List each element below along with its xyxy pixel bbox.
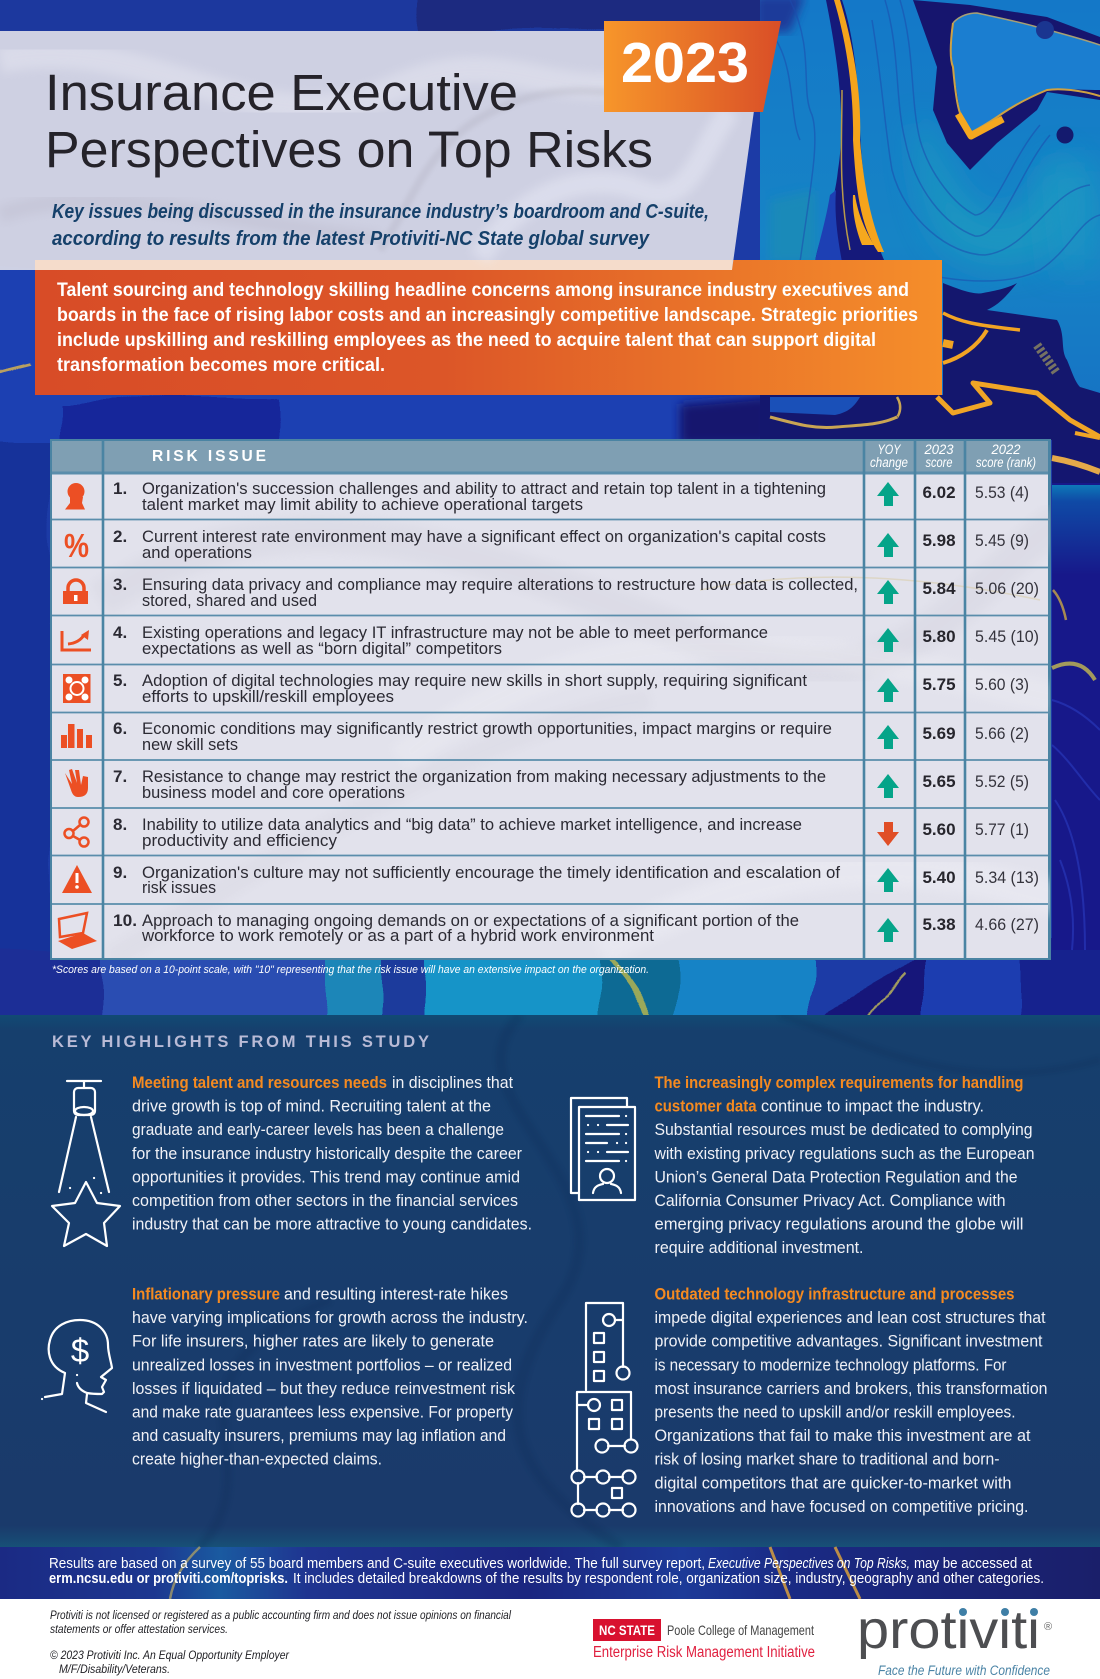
icon: bar chart	[61, 724, 92, 748]
icon: network square	[63, 674, 90, 703]
row 3: 5.06 (20)	[975, 579, 1039, 598]
footnote: *Scores are based on a 10-point scale, with "10" representing that the risk issue will have an extensive impact on the organization.	[52, 964, 649, 976]
row 7: 5.52 (5)	[975, 772, 1029, 791]
row 5: 5.60 (3)	[975, 675, 1029, 694]
NC State logo: NC STATE	[599, 1622, 655, 1638]
icon: head with dollar sign: $	[71, 1332, 89, 1369]
icon: laptop	[58, 913, 97, 949]
risk table	[50, 439, 1060, 960]
row 3: Ensuring data privacy and compliance may require alterations to restructure how data is collected,	[142, 575, 858, 594]
risk table: RISK ISSUE	[152, 448, 266, 465]
translucent title panel	[0, 31, 765, 270]
risk table: score	[926, 455, 952, 470]
highlight: technology: most insurance carriers and brokers, this transformation	[654, 1380, 1048, 1398]
highlight: technology: Organizations that fail to make this investment are at	[654, 1427, 1031, 1445]
row 9: 5.40	[922, 868, 956, 887]
survey note band: may be accessed at	[914, 1556, 1032, 1572]
highlight: technology: Outdated technology infrastructure and processes	[654, 1286, 1014, 1304]
row 4: Existing operations and legacy IT infrastructure may not be able to meet performance	[142, 623, 768, 642]
highlight: customer data: customer data	[654, 1098, 757, 1116]
icon: percent: %	[64, 527, 89, 564]
row 9: 9.	[113, 863, 127, 882]
highlight: talent: graduate and early-career levels has been a challenge	[132, 1121, 504, 1139]
highlight: technology: digital competitors that are quicker-to-market with	[654, 1474, 1012, 1492]
NC State logo: Enterprise Risk Management Initiative	[593, 1644, 815, 1661]
icon: person	[65, 483, 85, 510]
icon: documents	[571, 1098, 635, 1200]
panel: key highlights	[0, 1015, 1100, 1547]
row 8: 8.	[113, 815, 127, 834]
title: Perspectives on Top Risks	[45, 121, 653, 178]
survey note band	[0, 1547, 1100, 1599]
highlight: inflation: create higher-than-expected claims.	[132, 1451, 382, 1469]
highlight: talent	[132, 1074, 532, 1234]
icon: share nodes	[64, 818, 88, 846]
highlight: technology: innovations and have focused on competitive pricing.	[654, 1498, 1028, 1516]
highlight: inflation: and make rate guarantees less expensive. For property	[132, 1404, 514, 1422]
row 9: risk issues	[142, 878, 216, 897]
highlight: customer data: California Consumer Privacy Act. Compliance with	[654, 1192, 1006, 1210]
row 2: 5.98	[922, 531, 956, 550]
highlight: inflation: and resulting interest-rate hikes	[284, 1286, 508, 1304]
highlight: inflation: For life insurers, higher rates are likely to generate	[132, 1333, 494, 1351]
row 4: 5.80	[922, 627, 956, 646]
highlight: inflation: have varying implications for growth across the industry.	[132, 1309, 528, 1327]
summary callout text	[57, 280, 918, 376]
risk table: YOY	[878, 442, 901, 457]
row 10: 4.66 (27)	[975, 915, 1039, 934]
row 3: 3.	[113, 575, 127, 594]
row 5: 5.75	[922, 675, 956, 694]
Protiviti logo	[857, 1600, 1052, 1678]
survey note band: Executive Perspectives on Top Risks,	[708, 1556, 910, 1572]
row 10: workforce to work remotely or as a part of a hybrid work environment	[141, 926, 654, 945]
row 10	[113, 911, 1039, 945]
row 1: 1.	[113, 479, 127, 498]
legal text: statements or offer attestation services.	[50, 1624, 228, 1636]
row 4: 4.	[113, 623, 127, 642]
NC State logo: Poole College of Management	[667, 1622, 814, 1638]
year badge: 2023	[621, 31, 749, 95]
row 5: Adoption of digital technologies may require new skills in short supply, requiring significant	[142, 671, 807, 690]
row 3: stored, shared and used	[142, 591, 317, 610]
row 1: 5.53 (4)	[975, 483, 1029, 502]
background: marbled blue and gold	[0, 0, 1100, 1100]
row 7: business model and core operations	[142, 783, 405, 802]
row 2: 2.	[113, 527, 127, 546]
legal text	[50, 1610, 511, 1676]
row 7	[113, 767, 1029, 802]
Protiviti logo: ®	[1044, 1621, 1052, 1633]
row 8: productivity and efficiency	[142, 831, 337, 850]
highlight: technology: risk of losing market share to traditional and born-	[654, 1451, 1000, 1469]
highlight: talent: competition from other sectors in the financial services	[132, 1192, 518, 1210]
row 8	[113, 815, 1029, 850]
icon: head with dollar sign	[42, 1320, 112, 1412]
grid lines	[52, 441, 1048, 958]
summary callout text: Talent sourcing and technology skilling headline concerns among insurance industry executives and	[57, 280, 909, 301]
icon: growth chart	[62, 630, 91, 650]
row 1: Organization's succession challenges and ability to attract and retain top talent in a tightening	[142, 479, 826, 498]
highlight: talent: Meeting talent and resources needs	[132, 1074, 387, 1092]
highlight: talent: drive growth is top of mind. Recruiting talent at the	[132, 1098, 491, 1116]
highlight: talent: industry that can be more attractive to young candidates.	[132, 1216, 532, 1234]
highlight: inflation: unrealized losses in investment portfolios – or realized	[132, 1356, 512, 1374]
icon: lock	[63, 580, 88, 604]
row 5: 5.	[113, 671, 127, 690]
heading: KEY HIGHLIGHTS FROM THIS STUDY	[52, 1033, 429, 1051]
table body marble	[52, 441, 1060, 960]
survey note band: Results are based on a survey of 55 board members and C-suite executives worldwide. The full survey report,	[49, 1556, 705, 1572]
row 9	[113, 863, 1039, 897]
highlight: customer data: The increasingly complex requirements for handling	[654, 1074, 1024, 1092]
row 7: 5.65	[922, 772, 956, 791]
row 6: new skill sets	[142, 735, 238, 754]
row 2	[113, 527, 1029, 562]
survey note band: erm.ncsu.edu or protiviti.com/toprisks.	[49, 1571, 288, 1587]
row 8: 5.77 (1)	[975, 820, 1029, 839]
YOY arrows	[877, 482, 899, 942]
subtitle: Key issues being discussed in the insurance industry’s boardroom and C-suite,	[52, 201, 709, 223]
subtitle	[52, 201, 709, 250]
row 2: 5.45 (9)	[975, 531, 1029, 550]
title	[45, 64, 653, 178]
row 9: 5.34 (13)	[975, 868, 1039, 887]
highlight: talent: in disciplines that	[392, 1074, 513, 1092]
risk table: 2023	[924, 442, 954, 457]
row 6	[113, 719, 1029, 754]
row 8: Inability to utilize data analytics and “big data” to achieve market intelligence, and increase	[142, 815, 802, 834]
summary callout text: boards in the face of rising labor costs and an increasingly competitive landscape. Strategic priorities	[57, 305, 918, 326]
footer white area	[0, 1599, 1100, 1679]
icon: hand	[65, 769, 88, 797]
icon: warning	[62, 865, 92, 893]
row 5: efforts to upskill/reskill employees	[142, 687, 394, 706]
row 6: 5.66 (2)	[975, 724, 1029, 743]
row 1: talent market may limit ability to achieve operational targets	[142, 495, 583, 514]
highlight: inflation	[132, 1286, 528, 1469]
highlight: customer data	[654, 1074, 1034, 1257]
row 4: expectations as well as “born digital” competitors	[142, 639, 502, 658]
row 8: 5.60	[922, 820, 956, 839]
highlight: customer data: require additional investment.	[654, 1239, 864, 1257]
highlight: technology: provide competitive advantages. Significant investment	[654, 1333, 1043, 1351]
highlight: talent: for the insurance industry historically despite the career	[132, 1145, 523, 1163]
row 3	[113, 575, 1039, 610]
highlight: customer data: Substantial resources must be dedicated to complying	[654, 1121, 1032, 1139]
highlight: technology: is necessary to modernize technology platforms. For	[654, 1356, 1007, 1374]
row 1: 6.02	[922, 483, 956, 502]
highlight: customer data: Union’s General Data Protection Regulation and the	[654, 1168, 1018, 1186]
risk table: change	[870, 455, 908, 470]
risk table: 2022	[991, 442, 1021, 457]
highlight: technology: impede digital experiences and lean cost structures that	[654, 1309, 1046, 1327]
row 6: 5.69	[922, 724, 956, 743]
row 6: Economic conditions may significantly restrict growth opportunities, impact margins or require	[142, 719, 832, 738]
row 10: Approach to managing ongoing demands on or expectations of a significant portion of the	[142, 911, 799, 930]
legal text: © 2023 Protiviti Inc. An Equal Opportunity Employer	[50, 1650, 290, 1662]
highlight: customer data: emerging privacy regulations around the globe will	[654, 1216, 1024, 1234]
survey note band: It includes detailed breakdowns of the results by respondent role, organization size, industry, geography and other categories.	[293, 1571, 1044, 1587]
row 9: Organization's culture may not sufficiently encourage the timely identification and escalation of	[142, 863, 840, 882]
year badge	[604, 21, 781, 112]
row 7: 7.	[113, 767, 127, 786]
risk table: score (rank)	[976, 455, 1036, 470]
orange summary box background	[35, 260, 942, 395]
title: Insurance Executive	[45, 64, 518, 121]
NC State logo	[593, 1619, 815, 1661]
row 1	[113, 479, 1029, 514]
icon: spotlight and star	[52, 1081, 120, 1246]
row 6: 6.	[113, 719, 127, 738]
legal text: M/F/Disability/Veterans.	[59, 1664, 170, 1676]
row 3: 5.84	[922, 579, 956, 598]
highlight: technology	[654, 1286, 1048, 1516]
Protiviti logo: protiviti	[857, 1600, 1040, 1660]
highlight: talent: opportunities it provides. This trend may continue amid	[132, 1168, 520, 1186]
highlight: customer data: continue to impact the industry.	[761, 1098, 984, 1116]
highlight: customer data: with existing privacy regulations such as the European	[654, 1145, 1034, 1163]
table header	[52, 441, 1048, 472]
icon: circuit blocks	[572, 1303, 638, 1516]
row 2: Current interest rate environment may have a significant effect on organization's capital costs	[142, 527, 826, 546]
highlight: inflation: and casualty insurers, premiums may lag inflation and	[132, 1427, 506, 1445]
highlight: inflation: losses if liquidated – but they reduce reinvestment risk	[132, 1380, 516, 1398]
Protiviti logo: Face the Future with Confidence	[878, 1663, 1050, 1678]
summary callout text: transformation becomes more critical.	[57, 355, 385, 376]
legal text: Protiviti is not licensed or registered as a public accounting firm and does not issue opinions on financial	[50, 1610, 511, 1622]
row 5	[113, 671, 1029, 706]
row 10: 10.	[113, 911, 137, 930]
row 4: 5.45 (10)	[975, 627, 1039, 646]
subtitle: according to results from the latest Protiviti-NC State global survey	[52, 228, 650, 250]
row 10: 5.38	[922, 915, 956, 934]
highlight: technology: presents the need to upskill and/or reskill employees.	[654, 1404, 1016, 1422]
down arrow row 8	[877, 822, 899, 846]
row 7: Resistance to change may restrict the organization from making necessary adjustments to the	[142, 767, 826, 786]
highlight: inflation: Inflationary pressure	[132, 1286, 280, 1304]
summary callout text: include upskilling and reskilling employees as the need to acquire talent that can support digital	[57, 330, 876, 351]
row 2: and operations	[142, 543, 252, 562]
row 4	[113, 623, 1039, 658]
